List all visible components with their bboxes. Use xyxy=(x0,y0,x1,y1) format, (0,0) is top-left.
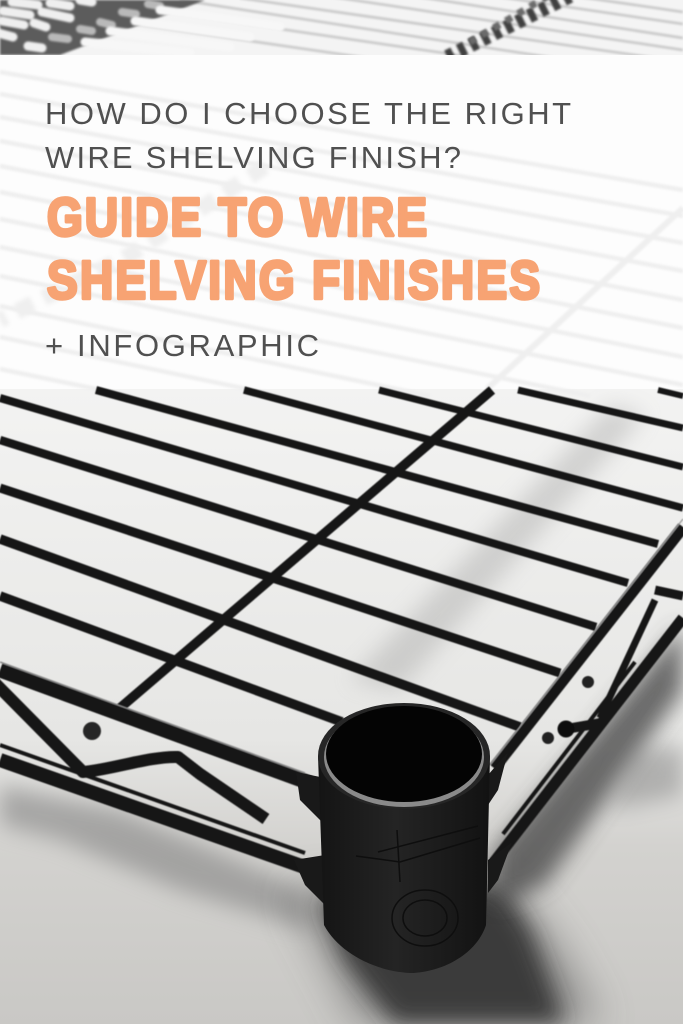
wire shelf grid xyxy=(0,390,683,727)
main title: GUIDE TO WIRE xyxy=(47,187,427,247)
top photo strip: blurred wire grid xyxy=(0,0,683,92)
heading question xyxy=(45,96,571,175)
shelf frame: front tubes and supports xyxy=(0,662,310,869)
heading question: WIRE SHELVING FINISH? xyxy=(45,140,461,175)
embossed logo on post xyxy=(356,826,480,946)
corner post: wire shelving collar xyxy=(294,703,512,973)
subheading: + INFOGRAPHIC xyxy=(45,328,319,363)
translucent white header panel xyxy=(0,55,683,396)
background photo: surface and shadows xyxy=(0,389,683,1024)
heading question: HOW DO I CHOOSE THE RIGHT xyxy=(45,96,571,131)
main title: SHELVING FINISHES xyxy=(47,250,540,310)
main title xyxy=(47,187,540,310)
shelf frame: right tubes and supports xyxy=(490,519,683,862)
